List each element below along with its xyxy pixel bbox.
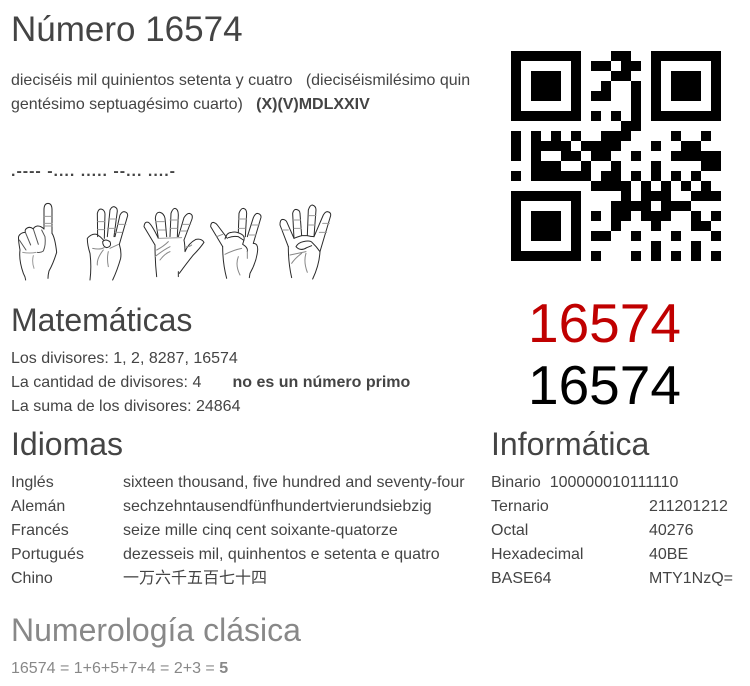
QR code [511, 51, 721, 261]
morse code: .---- -.... ..... --... ....- [11, 163, 176, 180]
number in black: 16574 [528, 354, 681, 416]
description text: dieciséis mil quinientos setenta y cuatro (dieciséismilésimo quin gentésimo septuagésimo cuarto) (X)(V)MDLXXIV [11, 72, 470, 113]
heading: Idiomas: Idiomas [11, 426, 123, 462]
panel: mathematics facts: Los divisores: 1, 2, 8287, 16574 La cantidad de divisores: 4 no es un número primo La suma de los divisores: 24864 [11, 350, 410, 415]
numerology formula: 16574 = 1+6+5+7+4 = 2+3 = 5 [11, 660, 228, 677]
heading: Informática: Informática [491, 426, 649, 462]
panel: languages names: Inglés Alemán Francés Portugués Chino [11, 474, 84, 587]
heading: Numerología clásica: Numerología clásica [11, 612, 301, 648]
panel: languages values: sixteen thousand, five hundred and seventy-four sechzehntausendfünfhundertvierundsiebzig seize mille cinq cent soixante-quatorze dezesseis mil, quinhentos e setenta e quatro 一万六千五百七十四 [123, 474, 465, 587]
panel: computing names: Binario 100000010111110 Ternario Octal Hexadecimal BASE64 [491, 474, 678, 587]
panel: computing values: 211201212 40276 40BE MTY1NzQ= [649, 498, 733, 587]
title: Número 16574 [11, 10, 243, 49]
heading: Matemáticas: Matemáticas [11, 302, 192, 338]
number in red: 16574 [528, 292, 681, 354]
